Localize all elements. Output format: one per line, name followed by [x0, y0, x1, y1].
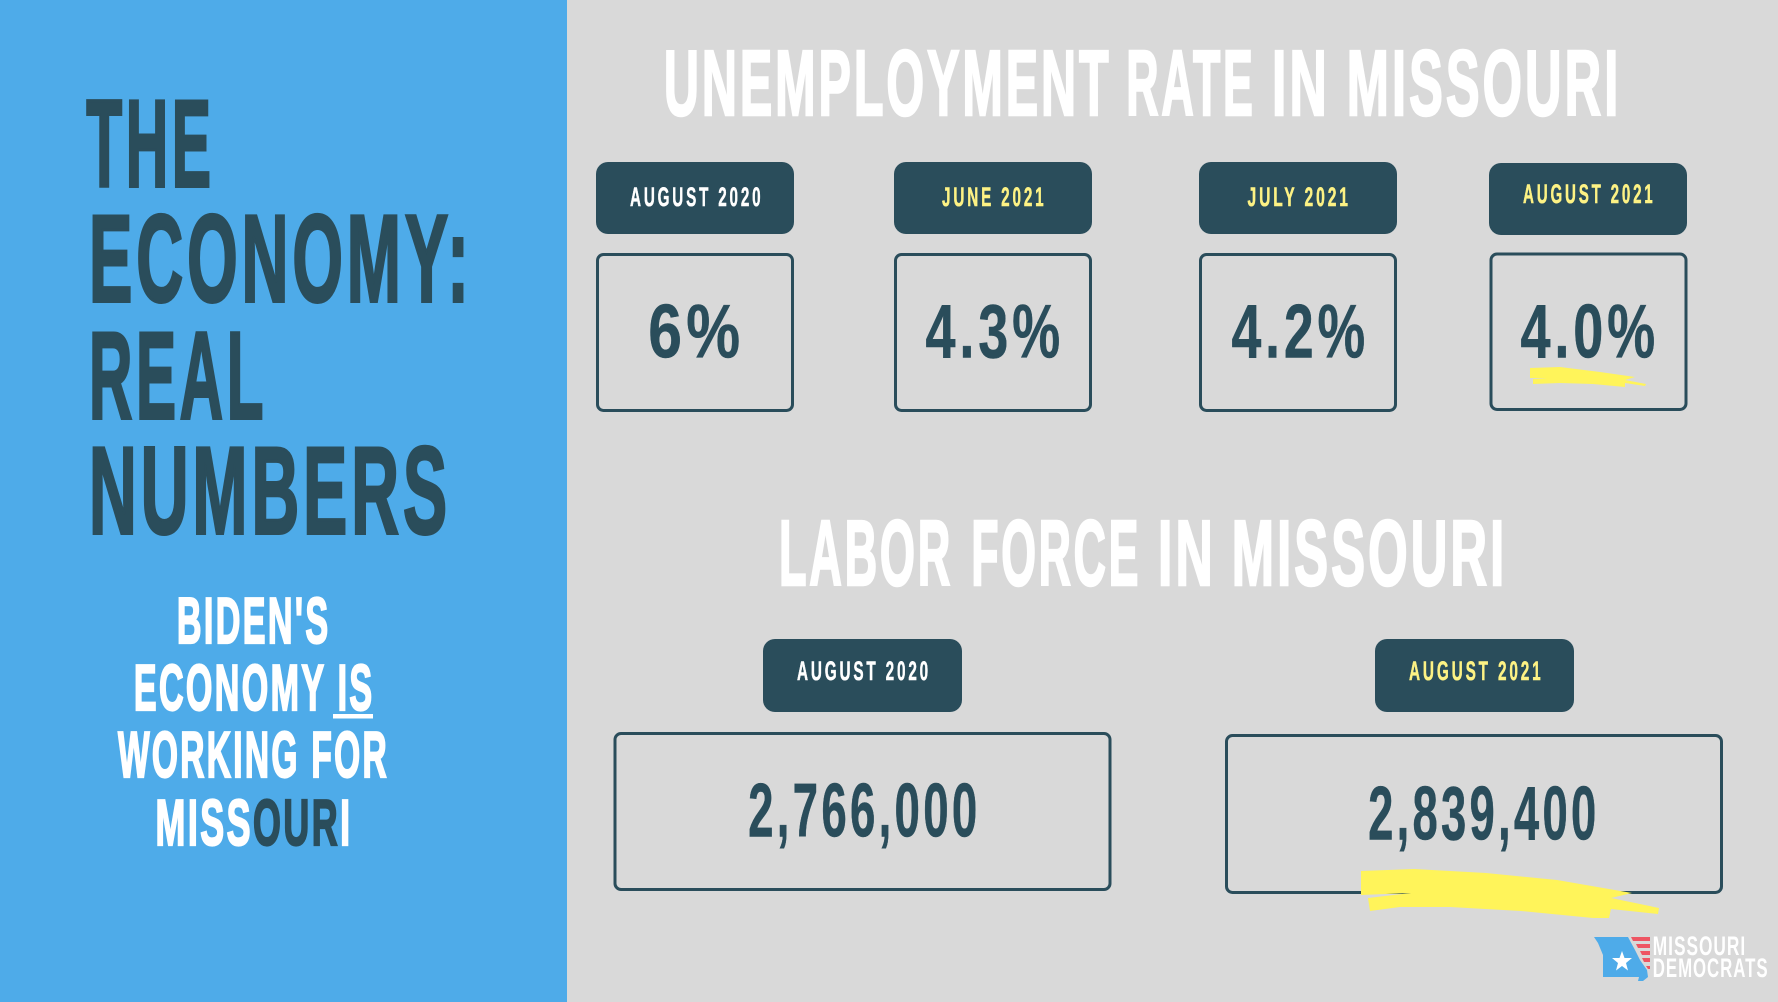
card: August 2020 labor force: AUGUST 2020 [797, 656, 931, 686]
title: REAL [89, 308, 267, 446]
title: ECONOMY: [89, 190, 473, 328]
heading: labor force: MISSOURI [1232, 501, 1507, 605]
card: August 2021 unemployment: 4.0% [1520, 290, 1659, 374]
highlight: yellow brush under 4.0% [1530, 367, 1646, 387]
card: August 2020 unemployment: 6% [648, 290, 744, 374]
heading: labor force: LABOR [779, 501, 953, 605]
card: August 2021 labor force [1226, 639, 1722, 918]
title: NUMBERS [89, 422, 451, 560]
card: August 2021 labor force: AUGUST 2021 [1409, 656, 1544, 686]
heading: labor force: IN [1158, 501, 1216, 605]
highlight: yellow brush under 2,839,400 [1361, 869, 1659, 918]
subtitle text [118, 584, 389, 859]
logo: Missouri Democrats [1594, 931, 1768, 983]
card: August 2020 unemployment: AUGUST 2020 [630, 182, 763, 212]
card: July 2021 unemployment: 4.2% [1232, 290, 1369, 374]
subtitle text: BIDEN'S [177, 584, 330, 657]
subtitle text: ECONOMY IS [134, 651, 374, 724]
card: August 2020 labor force [615, 639, 1110, 890]
title: THE [86, 76, 214, 214]
heading: labor force [779, 501, 1507, 605]
card: August 2020 unemployment [596, 162, 794, 410]
subtitle text: MISSOURI [156, 786, 352, 859]
subtitle text: WORKING FOR [118, 718, 389, 791]
title [86, 76, 473, 560]
panel: left blue sidebar [0, 0, 567, 1002]
heading: unemployment rate: UNEMPLOYMENT [664, 31, 1112, 135]
card: June 2021 unemployment [894, 162, 1092, 410]
card: June 2021 unemployment: JUNE 2021 [942, 182, 1046, 212]
card: August 2021 labor force: 2,839,400 [1368, 772, 1600, 856]
card: August 2020 labor force: 2,766,000 [748, 768, 980, 854]
card: July 2021 unemployment: JULY 2021 [1248, 182, 1351, 212]
heading: labor force: FORCE [971, 501, 1141, 605]
heading: unemployment rate: RATE [1126, 31, 1256, 135]
card: June 2021 unemployment: 4.3% [926, 290, 1064, 374]
card: August 2021 unemployment [1489, 163, 1687, 410]
heading: unemployment rate: IN [1272, 31, 1330, 135]
icon: Missouri state with star and stripes [1594, 937, 1650, 981]
card: August 2021 unemployment: AUGUST 2021 [1523, 179, 1656, 209]
card: July 2021 unemployment [1199, 162, 1397, 410]
